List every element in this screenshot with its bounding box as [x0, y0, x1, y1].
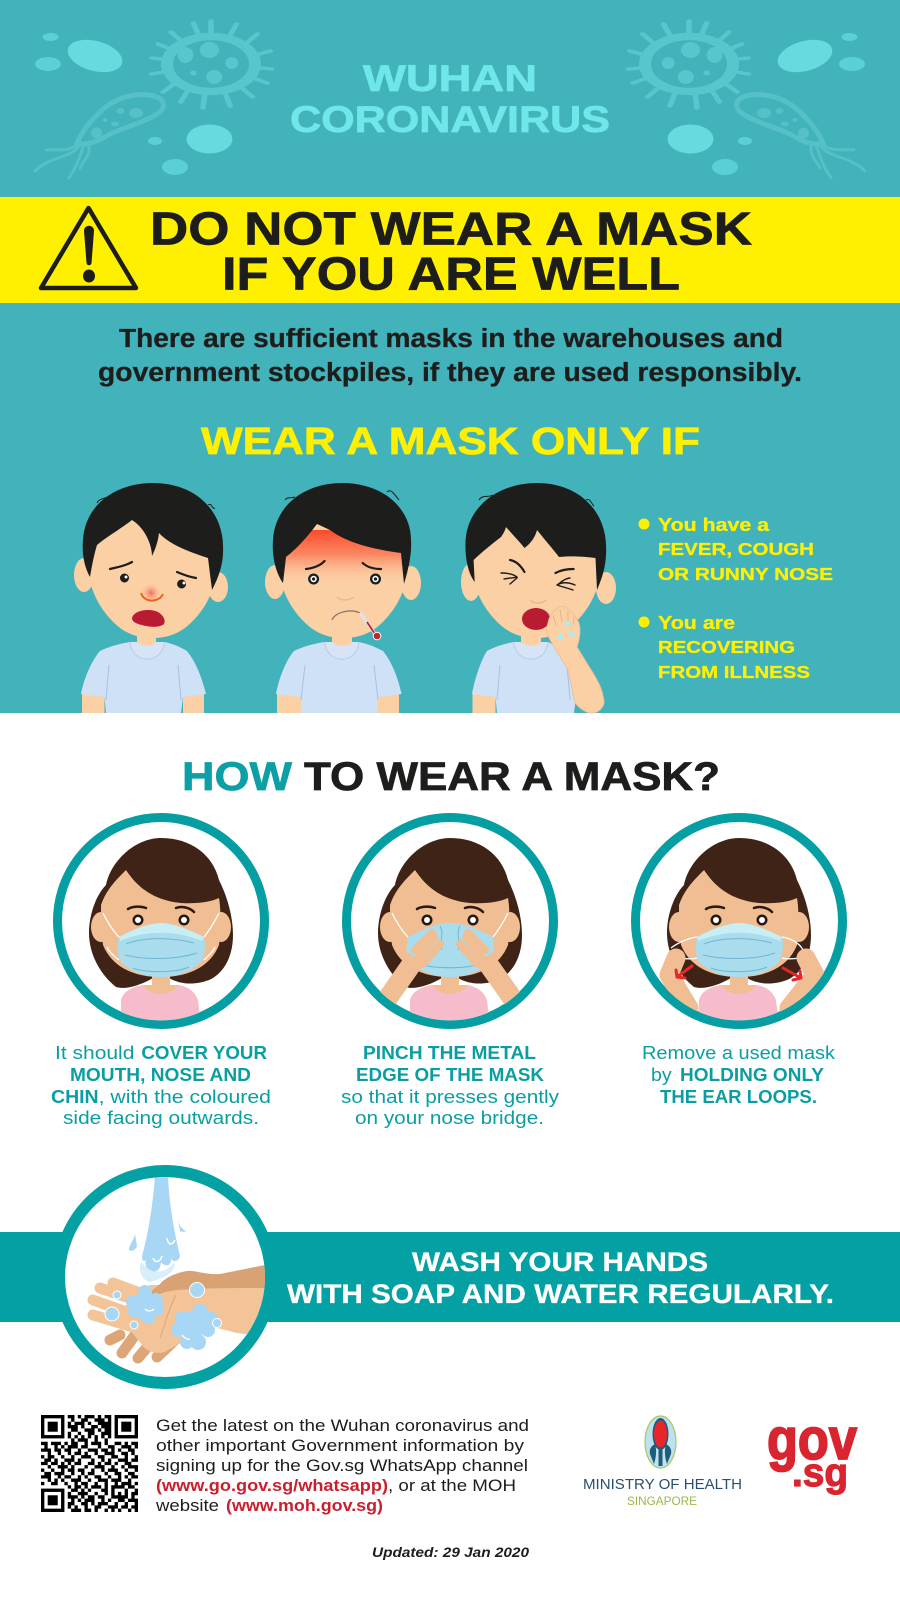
- logo: Ministry of Health Singapore: MINISTRY OF HEALTH: [583, 1477, 742, 1493]
- heading: do not wear a mask: IF YOU ARE WELL: [222, 248, 680, 300]
- logo: gov.sg: [767, 1407, 857, 1495]
- text: sufficient masks statement: There are sufficient masks in the warehouses and: [119, 325, 783, 353]
- illustration: hand washing circle: [59, 1171, 271, 1383]
- bullet: recovering from illness: [639, 612, 810, 682]
- text: get the latest information: signing up for the Gov.sg WhatsApp channel: [156, 1457, 528, 1475]
- panel: teal upper section background: [0, 0, 900, 713]
- panel: yellow warning banner: [0, 197, 900, 303]
- text: updated date: Updated: 29 Jan 2020: [372, 1545, 530, 1560]
- caption: remove a used mask: Remove a used mask: [642, 1043, 836, 1063]
- caption: pinch the metal edge: on your nose bridge.: [355, 1108, 544, 1128]
- bullet: fever cough or runny nose: You have a: [658, 514, 770, 535]
- text: sufficient masks statement: government stockpiles, if they are used responsibly.: [98, 359, 802, 387]
- text: get the latest information: [155, 1417, 529, 1515]
- heading: do not wear a mask: DO NOT WEAR A MASK: [150, 202, 752, 254]
- caption: pinch the metal edge: so that it presses gently: [341, 1087, 559, 1107]
- illustration: boy coughing: [461, 483, 616, 713]
- bullet: recovering from illness: RECOVERING: [658, 637, 795, 657]
- heading: do not wear a mask: [150, 202, 752, 300]
- caption: cover your mouth, nose and chin: It should: [55, 1043, 134, 1063]
- caption: cover your mouth, nose and chin: , with the coloured: [99, 1087, 271, 1107]
- icon: warning triangle: [41, 208, 136, 288]
- caption: remove a used mask: THE EAR LOOPS.: [660, 1087, 817, 1107]
- text: get the latest information: other important Government information by: [156, 1437, 525, 1455]
- decoration: right virus illustrations: [628, 21, 865, 178]
- decoration: left virus illustrations: [35, 21, 272, 178]
- bullet: fever cough or runny nose: OR RUNNY NOSE: [658, 564, 833, 584]
- text: get the latest information: Get the latest on the Wuhan coronavirus and: [156, 1417, 529, 1435]
- heading: how to wear a mask: HOW: [182, 755, 292, 799]
- caption: cover your mouth, nose and chin: MOUTH, NOSE AND: [70, 1065, 251, 1085]
- bullet: recovering from illness: You are: [658, 612, 735, 633]
- title: Wuhan Coronavirus: [290, 58, 610, 140]
- illustration: boy with runny nose: [74, 483, 228, 713]
- panel: wash your hands band: [0, 1232, 900, 1322]
- heading: wash your hands: WASH YOUR HANDS: [412, 1247, 708, 1277]
- caption: remove a used mask: HOLDING ONLY: [680, 1065, 824, 1085]
- text: get the latest information: , or at the MOH: [388, 1477, 516, 1495]
- heading: wash your hands: WITH SOAP AND WATER REGULARLY.: [287, 1279, 834, 1309]
- illustration: woman pinching metal edge of mask: [346, 818, 554, 1025]
- QR code: [41, 1417, 138, 1510]
- heading: how to wear a mask: TO WEAR A MASK?: [304, 755, 720, 799]
- caption: pinch the metal edge: [341, 1043, 559, 1128]
- list: when to wear a mask: [639, 514, 833, 682]
- logo: Ministry of Health Singapore: SINGAPORE: [627, 1494, 697, 1508]
- caption: pinch the metal edge: PINCH THE METAL: [363, 1043, 536, 1063]
- caption: remove a used mask: by: [651, 1065, 672, 1085]
- caption: pinch the metal edge: EDGE OF THE MASK: [356, 1065, 544, 1085]
- logo: gov.sg: .sg: [792, 1451, 848, 1495]
- illustration: woman with mask covering face: [58, 818, 264, 1025]
- caption: cover your mouth, nose and chin: [51, 1043, 271, 1128]
- text: sufficient masks statement: [98, 325, 802, 387]
- logo: Ministry of Health Singapore: [583, 1416, 742, 1508]
- illustration: boy with fever and thermometer: [265, 483, 421, 713]
- bullet: fever cough or runny nose: [639, 514, 833, 584]
- text: get the latest information: (www.go.gov.sg/whatsapp): [156, 1477, 388, 1495]
- illustration: woman removing mask by ear loops: [636, 818, 842, 1025]
- heading: wear a mask only if: WEAR A MASK ONLY IF: [201, 421, 700, 463]
- caption: cover your mouth, nose and chin: side facing outwards.: [63, 1108, 259, 1128]
- text: get the latest information: website: [155, 1497, 219, 1515]
- title: Wuhan Coronavirus: CORONAVIRUS: [290, 99, 610, 140]
- bullet: fever cough or runny nose: FEVER, COUGH: [658, 539, 814, 559]
- caption: remove a used mask: [642, 1043, 836, 1107]
- title: Wuhan Coronavirus: WUHAN: [363, 58, 537, 99]
- logo: gov.sg: gov: [767, 1407, 857, 1472]
- heading: wash your hands: [287, 1247, 834, 1309]
- text: get the latest information: (www.moh.gov.sg): [226, 1497, 383, 1515]
- caption: cover your mouth, nose and chin: COVER YOUR: [141, 1043, 267, 1063]
- caption: cover your mouth, nose and chin: CHIN: [51, 1087, 99, 1107]
- bullet: recovering from illness: FROM ILLNESS: [658, 662, 810, 682]
